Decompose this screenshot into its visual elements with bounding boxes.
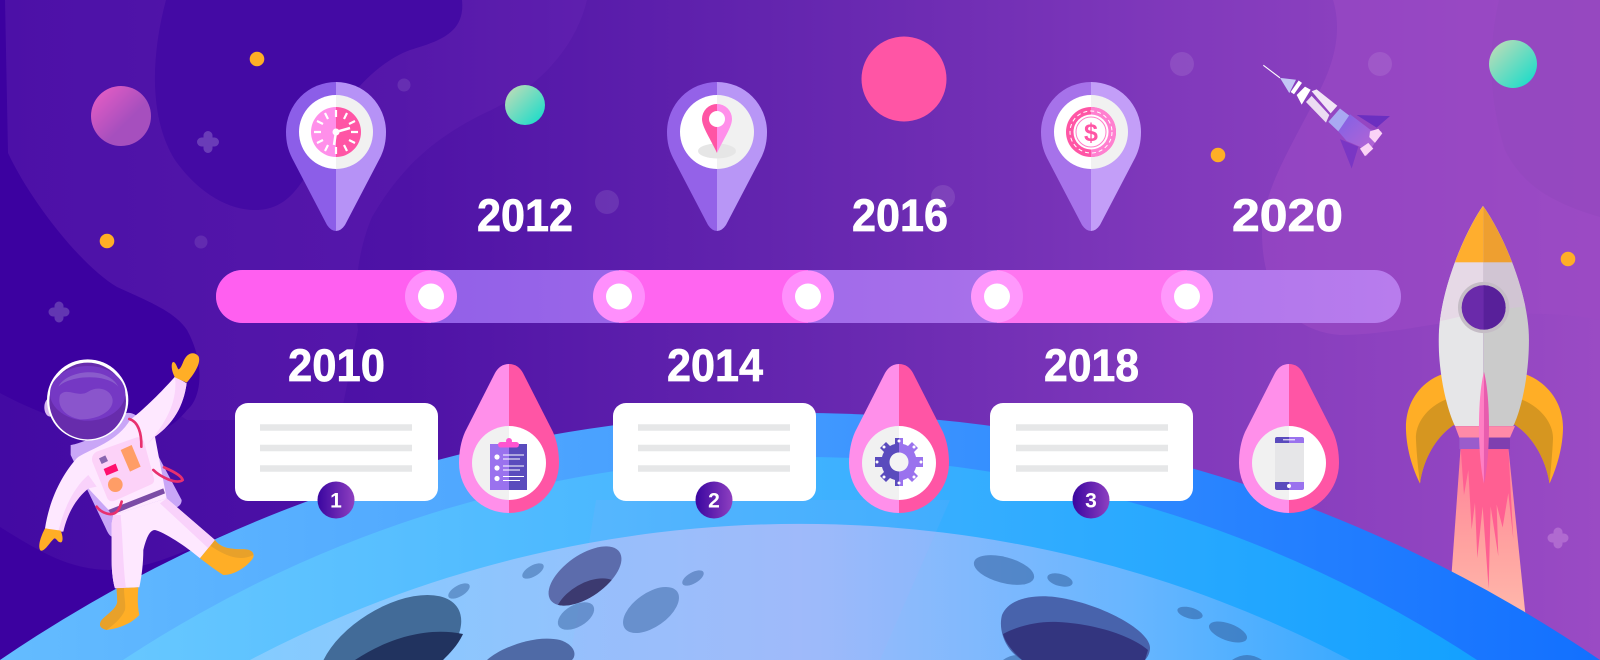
badge 1: 1 [330, 490, 342, 512]
year 2016: 2016 [852, 190, 948, 241]
timeline node 4 [971, 270, 1023, 322]
orange dots [100, 52, 1575, 266]
plus marks [53, 136, 1564, 544]
year 2014: 2014 [667, 340, 763, 391]
card 1 [235, 403, 438, 518]
year 2018: 2018 [1044, 340, 1139, 391]
card 2 [613, 403, 816, 518]
rocket window [1458, 282, 1509, 333]
rocket base bands [1455, 426, 1515, 449]
decorative faint circles [194, 52, 1392, 248]
small rocket [1263, 65, 1390, 169]
timeline node 5 [1161, 270, 1213, 322]
rocket center fin [1479, 372, 1489, 483]
badge 2 [696, 482, 732, 518]
icon: map marker [698, 104, 736, 158]
timeline node 2 [593, 270, 645, 322]
timeline bar [216, 270, 1401, 323]
chest pack [92, 437, 154, 501]
pin: clock [286, 82, 386, 231]
timeline node 1 [405, 270, 457, 322]
badge 1 [318, 482, 354, 518]
year 2012: 2012 [477, 190, 573, 241]
gloves [39, 353, 199, 551]
badge 2: 2 [708, 490, 720, 512]
drop: gear [849, 364, 949, 513]
planet: pink left [91, 86, 151, 146]
rocket fins [1406, 374, 1563, 483]
timeline node 3 [782, 270, 834, 322]
belt [108, 488, 165, 515]
planet: teal right [1489, 40, 1537, 88]
astronaut [39, 353, 254, 630]
year 2010: 2010 [288, 340, 385, 391]
icon: clipboard [490, 438, 527, 490]
badge 3: 3 [1085, 490, 1097, 512]
pin: coin [1041, 82, 1141, 231]
badge 3 [1072, 482, 1110, 518]
moon craters [324, 535, 1262, 660]
backpack [71, 413, 182, 537]
planet: big pink [862, 36, 946, 122]
card 3 [990, 403, 1193, 518]
icon: dollar coin: $ [1084, 119, 1098, 147]
moon surface [0, 413, 1600, 660]
icon: gear [875, 438, 923, 486]
big rocket [1406, 202, 1563, 642]
suit legs [112, 498, 215, 588]
year 2020: 2020 [1232, 190, 1343, 241]
pin: location [667, 82, 767, 231]
icon: clock [311, 107, 361, 157]
rocket body [1438, 206, 1529, 426]
icon: phone [1275, 437, 1304, 490]
harness tubes [97, 419, 183, 514]
icon: dollar coin [1066, 107, 1116, 157]
drop: phone [1239, 364, 1339, 513]
rocket flame [1447, 447, 1528, 642]
planet: teal center [505, 85, 545, 125]
boots [100, 540, 254, 630]
helmet [44, 359, 128, 441]
suit torso and arms [45, 377, 187, 532]
drop: clipboard [459, 364, 559, 513]
